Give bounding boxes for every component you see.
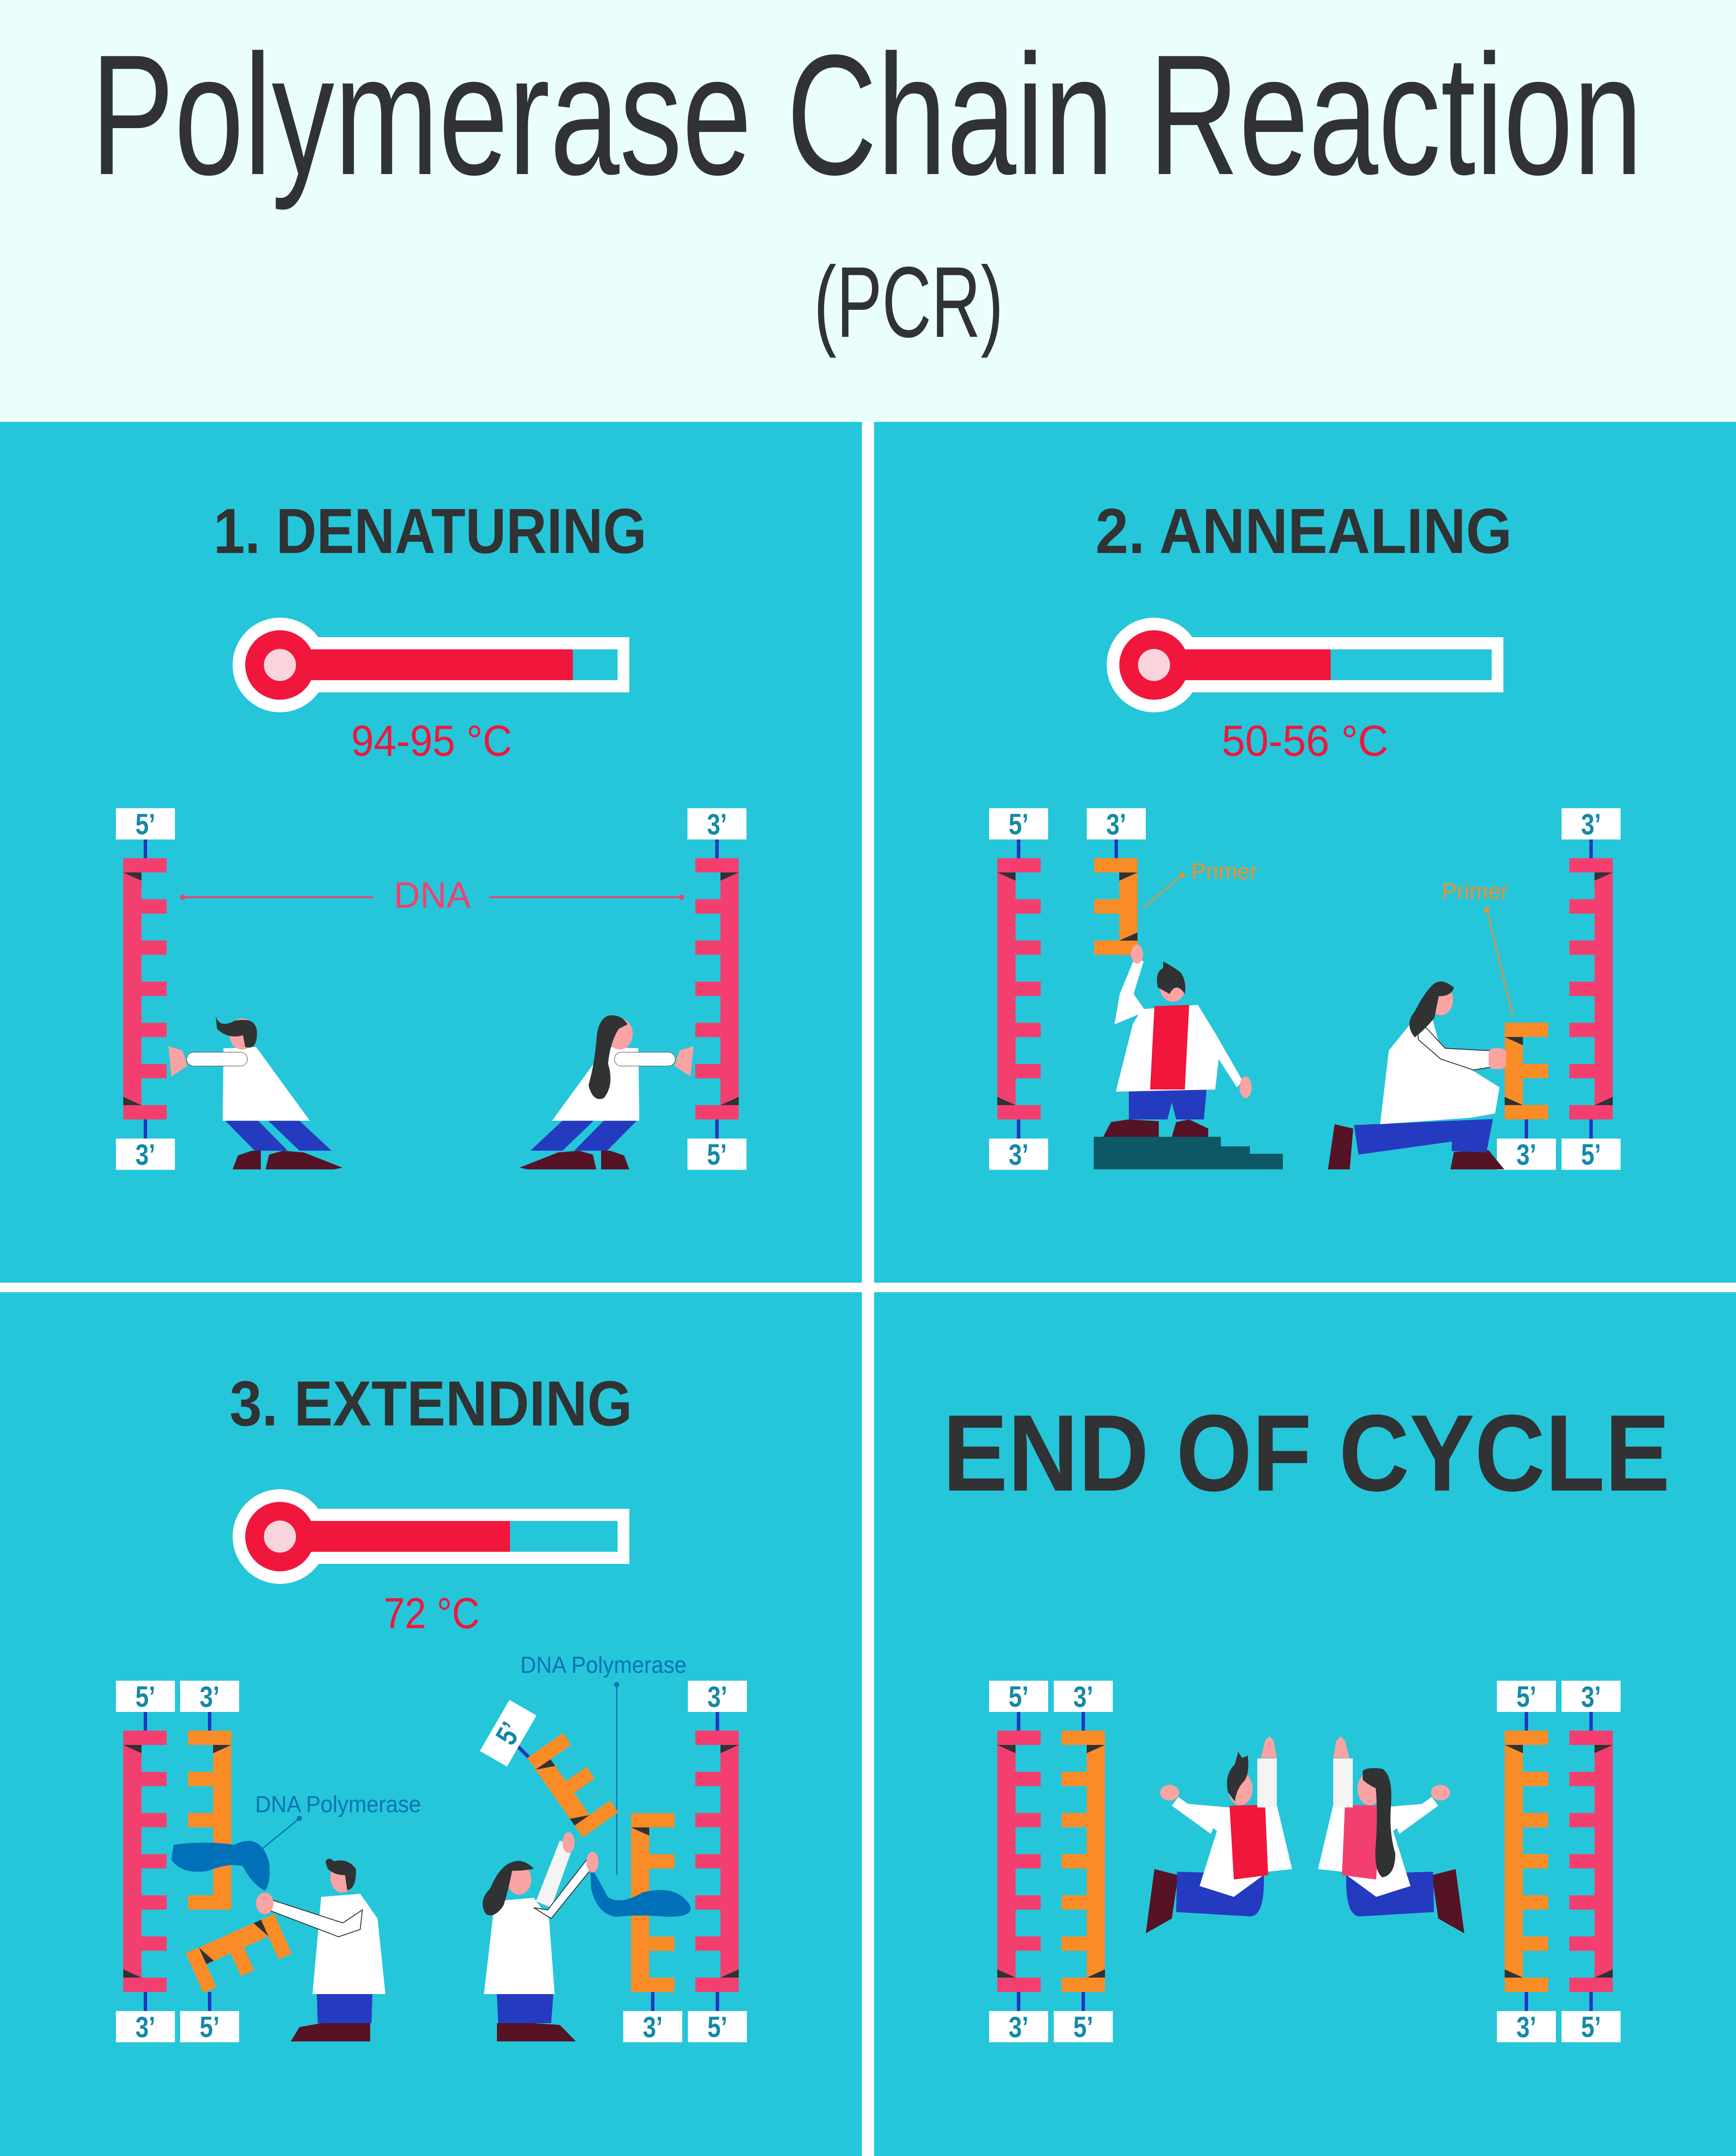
new strand left orange: 3’ [200, 1680, 220, 1713]
thermometer: 50-56 [1107, 618, 1503, 712]
double strand left: 3’ [1009, 2011, 1029, 2044]
steps [1094, 1137, 1283, 1169]
DNA strand right [687, 808, 746, 1171]
primer label right: Primer [1442, 879, 1508, 904]
temperature label: 94-95 °C [351, 717, 512, 765]
double strand right: 5’ [1581, 2011, 1601, 2044]
DNA strand right pink: 3’ [707, 1680, 727, 1713]
double strand left: 5’ [1009, 1680, 1029, 1713]
orange fragment held by man [186, 1914, 292, 1993]
scientist woman extending [483, 1832, 598, 2041]
temperature label: 72 °C [384, 1589, 480, 1638]
DNA polymerase label left: DNA Polymerase [255, 1791, 421, 1817]
DNA strand right [1562, 808, 1621, 1171]
DNA strand right pink: 5’ [707, 2011, 727, 2044]
panel: annealing [874, 422, 1736, 1283]
DNA strand left: 5’ [135, 808, 155, 841]
DNA annotation: DNA [394, 875, 471, 915]
primer label right [1442, 879, 1513, 1016]
header background [0, 0, 1736, 422]
scientist woman kneeling [1328, 981, 1506, 1169]
double strand right: 5’ [1516, 1680, 1536, 1713]
DNA polymerase label right: DNA Polymerase [520, 1652, 687, 1678]
DNA strand left: 3’ [1009, 1138, 1029, 1171]
DNA annotation [180, 875, 684, 915]
double strand left: 5’ [1073, 2011, 1093, 2044]
DNA strand left: 3’ [135, 1138, 155, 1171]
scientist woman pushing [519, 1015, 694, 1169]
tilted 5 label with fragment [480, 1700, 618, 1837]
thermometer: 72 [233, 1489, 629, 1584]
DNA strand left pink: 5’ [135, 1680, 155, 1713]
primer left [1087, 808, 1146, 955]
new strand right orange [623, 1813, 682, 2044]
double strand right [1497, 1680, 1621, 2044]
heading: extending: 3. EXTENDING [230, 1368, 632, 1439]
panel: denaturing [0, 422, 862, 1283]
double strand left [989, 1680, 1113, 2044]
panel: extending [0, 1292, 862, 2156]
DNA strand left [989, 808, 1048, 1171]
heading: end of cycle: END OF CYCLE [943, 1392, 1670, 1514]
scientist man pushing [168, 1016, 342, 1169]
heading: annealing: 2. ANNEALING [1095, 496, 1512, 567]
new strand left orange: 5’ [200, 2011, 220, 2044]
primer left: 3’ [1106, 808, 1126, 841]
temperature label: 50-56 °C [1222, 717, 1388, 765]
primer right: 3’ [1516, 1138, 1536, 1171]
DNA strand left pink [116, 1680, 175, 2044]
primer label left: Primer [1191, 859, 1257, 884]
scientist woman jumping [1318, 1736, 1464, 1933]
scientist man jumping [1146, 1736, 1292, 1933]
DNA strand right: 5’ [1581, 1138, 1601, 1171]
thermometer: 94-95 [233, 618, 629, 712]
panel: end of cycle [874, 1292, 1736, 2156]
DNA strand right: 3’ [1581, 808, 1601, 841]
heading: denaturing: 1. DENATURING [214, 496, 647, 567]
DNA polymerase label right [520, 1652, 687, 1875]
subtitle: (PCR) [814, 246, 1003, 359]
new strand right orange: 3’ [643, 2011, 663, 2044]
double strand left: 3’ [1073, 1680, 1093, 1713]
scientist man extending [256, 1859, 385, 2041]
primer label left [1144, 859, 1257, 908]
DNA polymerase blob left [171, 1841, 270, 1891]
DNA polymerase label left [255, 1791, 421, 1850]
DNA strand left [116, 808, 175, 1171]
DNA strand left pink: 3’ [135, 2011, 155, 2044]
new strand left orange [180, 1680, 239, 2044]
DNA strand right: 3’ [707, 808, 727, 841]
DNA strand left: 5’ [1009, 808, 1029, 841]
DNA strand right pink [688, 1680, 747, 2044]
double strand right: 3’ [1581, 1680, 1601, 1713]
scientist man standing [1103, 945, 1252, 1137]
primer right [1497, 1023, 1556, 1171]
double strand right: 3’ [1516, 2011, 1536, 2044]
tilted 5 label with fragment: 5’ [489, 1717, 528, 1750]
DNA polymerase blob right [590, 1866, 690, 1917]
DNA strand right: 5’ [707, 1138, 727, 1171]
